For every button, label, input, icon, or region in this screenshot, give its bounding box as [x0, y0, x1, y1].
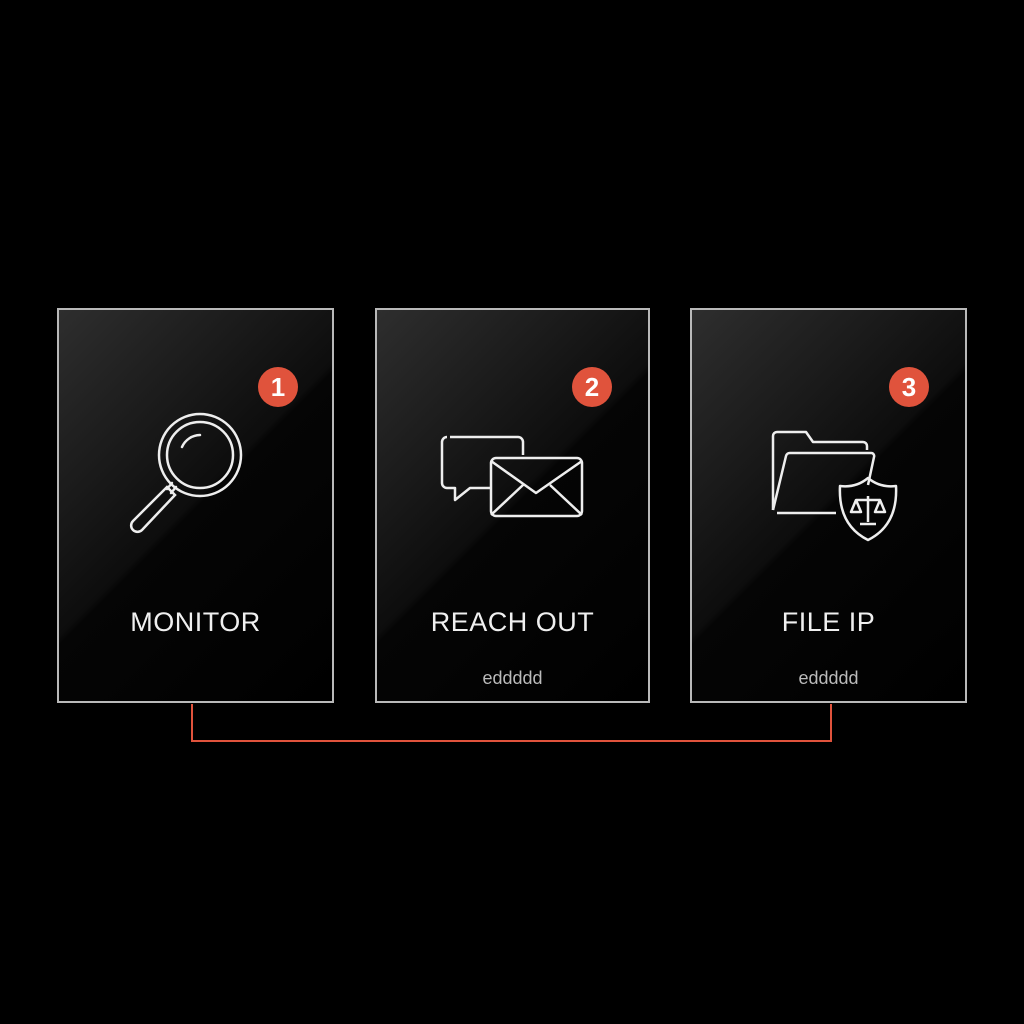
subtext 3: eddddd	[798, 668, 859, 688]
panel: monitor	[57, 308, 334, 703]
title: reach out: REACH OUT	[431, 607, 594, 637]
badge 2: 2	[585, 372, 599, 402]
subtext 2: eddddd	[482, 668, 543, 688]
panel: reach out	[375, 308, 650, 703]
badge 3: 3	[902, 372, 916, 402]
badge 2	[572, 367, 612, 407]
icon: chat and envelope	[440, 436, 584, 518]
title: monitor: MONITOR	[130, 607, 261, 637]
title: file ip: FILE IP	[782, 607, 875, 637]
badge 1	[258, 367, 298, 407]
badge 1: 1	[271, 372, 285, 402]
panel: file ip	[690, 308, 967, 703]
icon: magnifier	[130, 412, 242, 534]
icon: folder with shield	[772, 430, 898, 542]
badge 3	[889, 367, 929, 407]
